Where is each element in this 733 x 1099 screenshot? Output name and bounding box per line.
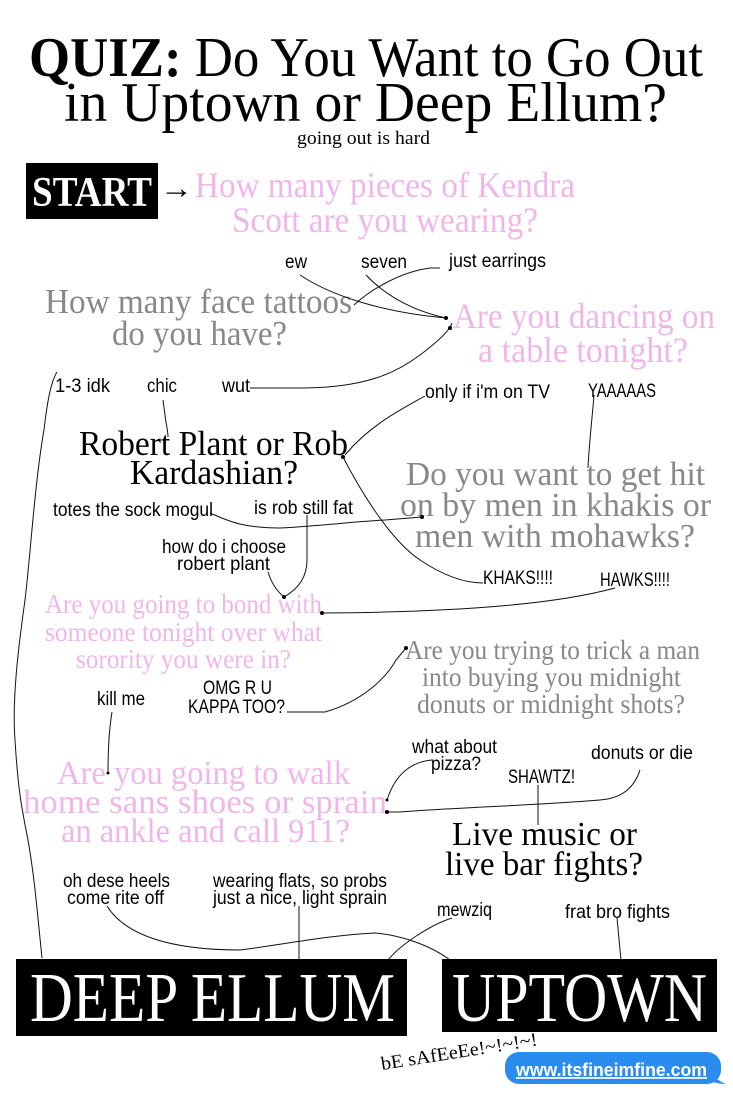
answers: face tattoos: chic	[147, 376, 177, 397]
answers: Kendra: ew	[285, 252, 307, 273]
question: walk home sans shoes: Are you going to walk	[57, 755, 350, 792]
question: trick a man: into buying you midnight	[422, 662, 681, 692]
question: trick a man	[405, 635, 700, 719]
question: khakis or mohawks: on by men in khakis or	[400, 487, 712, 524]
question: face tattoos: do you have?	[112, 314, 287, 353]
question: dancing on table: Are you dancing on	[453, 296, 715, 336]
result: Deep Ellum: DEEP ELLUM	[30, 960, 395, 1037]
answers: face tattoos	[55, 376, 251, 397]
sign-off text: bE sAfEeEe!~!~!~!	[379, 1029, 539, 1075]
subtitle: going out is hard	[297, 128, 431, 149]
answers: sorority	[97, 678, 285, 718]
answers: sorority: kill me	[97, 689, 145, 710]
connector lines	[14, 268, 640, 960]
answers: Robert Plant	[53, 498, 354, 575]
title: in Uptown or Deep Ellum?	[64, 72, 667, 134]
title	[29, 27, 703, 134]
question: live music: live bar fights?	[445, 846, 643, 883]
answers: face tattoos: wut	[221, 376, 251, 397]
answers: live music: mewziq	[437, 900, 492, 921]
answers: Kendra: just earrings	[448, 251, 546, 272]
answers: Robert Plant: robert plant	[177, 554, 271, 575]
answers: walk home: just a nice, light sprain	[212, 888, 387, 909]
question: sorority: sorority you were in?	[76, 644, 291, 674]
answers: dancing	[425, 381, 656, 403]
question: khakis or mohawks	[400, 456, 712, 555]
arrow: start: →	[160, 172, 193, 205]
question: Kendra Scott: Scott are you wearing?	[232, 200, 538, 240]
question: live music	[445, 816, 643, 883]
question: sorority: someone tonight over what	[45, 617, 322, 647]
answers: trick a man: pizza?	[431, 754, 481, 775]
dots	[106, 316, 452, 814]
question: dancing on table: a table tonight?	[478, 330, 688, 370]
answers: Kendra: seven	[361, 252, 407, 273]
answers: trick a man: SHAWTZ!	[508, 767, 575, 788]
question: Robert Plant: Robert Plant or Rob	[79, 424, 348, 463]
question: face tattoos: How many face tattoos	[45, 282, 352, 321]
question: Robert Plant	[79, 424, 348, 492]
answers: walk home: wearing flats, so probs	[212, 871, 387, 892]
question: walk home sans shoes: an ankle and call 911?	[61, 813, 350, 850]
question: trick a man: donuts or midnight shots?	[417, 689, 685, 719]
answers: dancing: only if i'm on TV	[425, 382, 550, 403]
question: khakis or mohawks: men with mohawks?	[415, 518, 695, 555]
question: live music: Live music or	[452, 816, 638, 853]
question: Kendra Scott	[195, 165, 575, 240]
answers: walk home: come rite off	[67, 888, 165, 909]
answers: Kendra	[285, 251, 546, 273]
answers: walk home: oh dese heels	[63, 871, 170, 892]
answers: sorority: OMG R U	[203, 678, 272, 699]
question: khakis or mohawks: Do you want to get hit	[406, 456, 706, 493]
question: dancing on table	[453, 296, 715, 370]
question: trick a man: Are you trying to trick a man	[405, 635, 700, 665]
title: QUIZ: Do You Want to Go Out	[29, 27, 703, 89]
question: sorority: Are you going to bond with	[45, 589, 322, 619]
message bubble: website	[505, 1052, 726, 1084]
answers: dancing: YAAAAAS	[588, 381, 656, 402]
answers: khakis: KHAKS!!!!	[483, 568, 553, 589]
question: face tattoos	[45, 282, 352, 353]
answers: trick a man: donuts or die	[591, 743, 693, 764]
question: walk home sans shoes	[23, 755, 387, 850]
answers: Robert Plant: totes the sock mogul	[53, 500, 213, 521]
answers: live music: frat bro fights	[565, 902, 670, 923]
message bubble: website: www.itsfineimfine.com	[515, 1060, 707, 1080]
answers: live music	[437, 900, 670, 923]
question: Kendra Scott: How many pieces of Kendra	[195, 165, 575, 205]
question: walk home sans shoes: home sans shoes or sprain	[23, 784, 387, 821]
answers: trick a man	[411, 737, 693, 788]
answers: khakis	[483, 568, 670, 591]
answers: walk home	[63, 871, 387, 909]
answers: sorority: KAPPA TOO?	[188, 697, 285, 718]
answers: trick a man: what about	[411, 737, 498, 758]
question: sorority	[45, 589, 322, 674]
start box: START	[32, 170, 152, 216]
answers: face tattoos: 1-3 idk	[55, 376, 110, 397]
answers: khakis: HAWKS!!!!	[600, 570, 670, 591]
answers: Robert Plant: is rob still fat	[254, 498, 354, 519]
question: Robert Plant: Kardashian?	[130, 453, 298, 492]
answers: Robert Plant: how do i choose	[162, 537, 286, 558]
